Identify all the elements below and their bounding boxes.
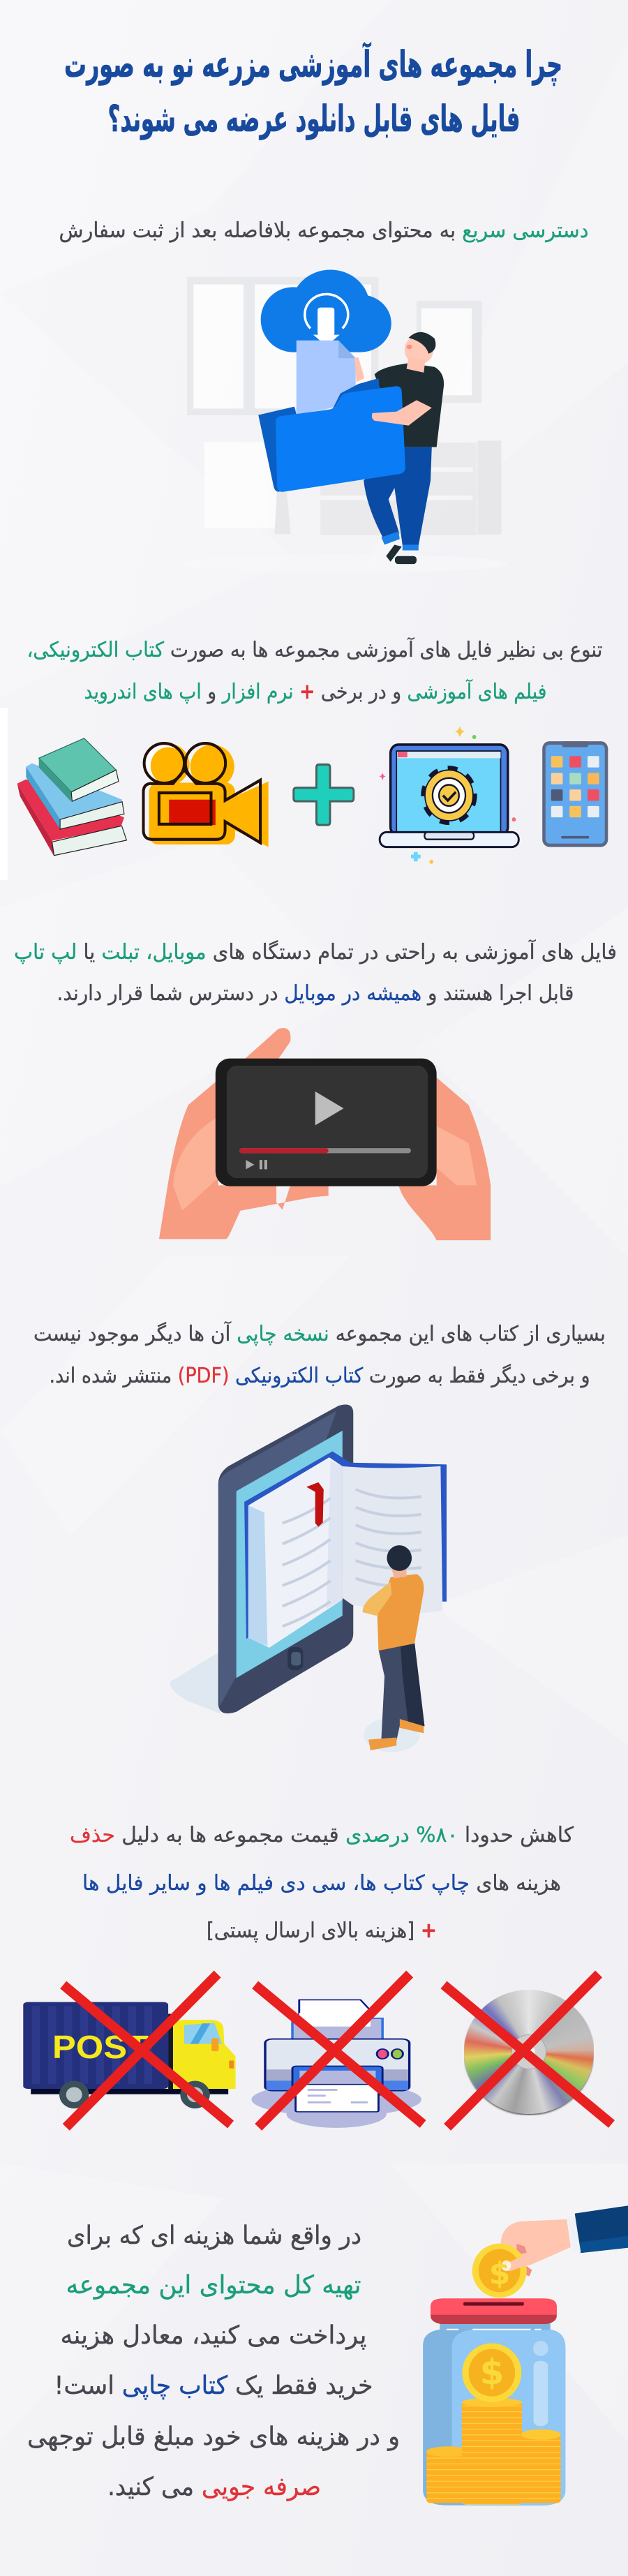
text block: instant access: دسترسی سریع به محتوای مجموعه بلافاصله بعد از ثبت سفارش: [59, 218, 589, 243]
icon: movie camera: [143, 743, 269, 847]
pants: [364, 447, 432, 564]
text block: variety of files: فیلم های آموزشی و در برخی + نرم افزار و اپ های اندروید: [84, 679, 547, 704]
jar: [423, 2323, 565, 2506]
text block: out of print books: [33, 1321, 606, 1388]
left hand: [159, 1028, 329, 1239]
dollar signs: $: [480, 2352, 504, 2392]
text block: devices: [14, 939, 617, 1006]
text block: out of print books: و برخی دیگر فقط به صورت کتاب الکترونیکی (PDF) منتشر شده اند.: [50, 1364, 590, 1388]
sleeve and hand: [501, 2205, 628, 2276]
text block: real cost conclusion: صرفه جویی می کنید.: [107, 2473, 321, 2501]
red cross marks: [63, 1974, 611, 2127]
folder: [258, 378, 405, 492]
illustration: tablet with open book and man: [170, 1405, 447, 1752]
title: [64, 42, 562, 140]
text block: real cost conclusion: و در هزینه های خود مبلغ قابل توجهی: [27, 2422, 400, 2451]
jar lid: [431, 2298, 557, 2324]
arm: [372, 400, 432, 426]
falling coin: [472, 2244, 529, 2298]
person upper body: [354, 332, 444, 447]
document: [297, 341, 356, 415]
illustration: man with folder and cloud download: [182, 269, 507, 573]
icons: truck and printer: [23, 2000, 421, 2128]
tablet: [170, 1405, 353, 1713]
icon: plus: [294, 764, 354, 825]
icon: laptop with gear: [380, 727, 518, 864]
phone with video player: [216, 1059, 437, 1186]
background room: [182, 277, 507, 573]
text block: price reduction: کاهش حدودا ۸۰% درصدی قیمت مجموعه ها به دلیل حذف: [70, 1823, 574, 1847]
text block: price reduction: هزینه های چاپ کتاب ها، سی دی فیلم ها و سایر فایل ها: [82, 1871, 561, 1896]
dollar signs: [480, 2256, 510, 2392]
icon: printer: [251, 2000, 421, 2128]
icons row: [0, 708, 608, 880]
bookmark: [306, 1482, 324, 1527]
text block: price reduction: + [هزینه بالای ارسال پستی]: [207, 1919, 437, 1943]
text block: real cost conclusion: پرداخت می کنید، معادل هزینه: [60, 2321, 367, 2350]
text block: real cost conclusion: در واقع شما هزینه ای که برای: [67, 2221, 361, 2250]
dollar signs: $: [489, 2256, 510, 2291]
text block: price reduction: [70, 1823, 574, 1943]
icon: crossed out CD: [464, 1990, 594, 2115]
right hand: [398, 1078, 491, 1240]
text block: devices: قابل اجرا هستند و همیشه در موبایل در دسترس شما قرار دارند.: [57, 981, 574, 1006]
text block: variety of files: [27, 637, 602, 704]
icon: post truck: [23, 2002, 236, 2108]
text block: real cost conclusion: [27, 2221, 400, 2501]
text block: variety of files: تنوع بی نظیر فایل های آموزشی مجموعه ها به صورت کتاب الکترونیکی،: [27, 637, 602, 662]
icon: smartphone: [542, 741, 608, 847]
text block: devices: فایل های آموزشی به راحتی در تمام دستگاه های موبایل، تبلت یا لپ تاپ: [14, 939, 617, 965]
illustration: coin jar with hand: [423, 2205, 628, 2506]
text block: out of print books: بسیاری از کتاب های این مجموعه نسخه چاپی آن ها دیگر موجود نیست: [33, 1321, 606, 1346]
text block: real cost conclusion: تهیه کل محتوای این مجموعه: [66, 2271, 361, 2300]
truck label: POST: [52, 2029, 149, 2065]
cloud with download arrow: [261, 269, 391, 352]
illustration: hands holding phone playing video: [159, 1028, 491, 1240]
man: [362, 1545, 424, 1752]
icon: stack of books: [17, 738, 126, 856]
open book: [244, 1451, 447, 1648]
text block: real cost conclusion: خرید فقط یک کتاب چاپی است!: [54, 2372, 373, 2400]
